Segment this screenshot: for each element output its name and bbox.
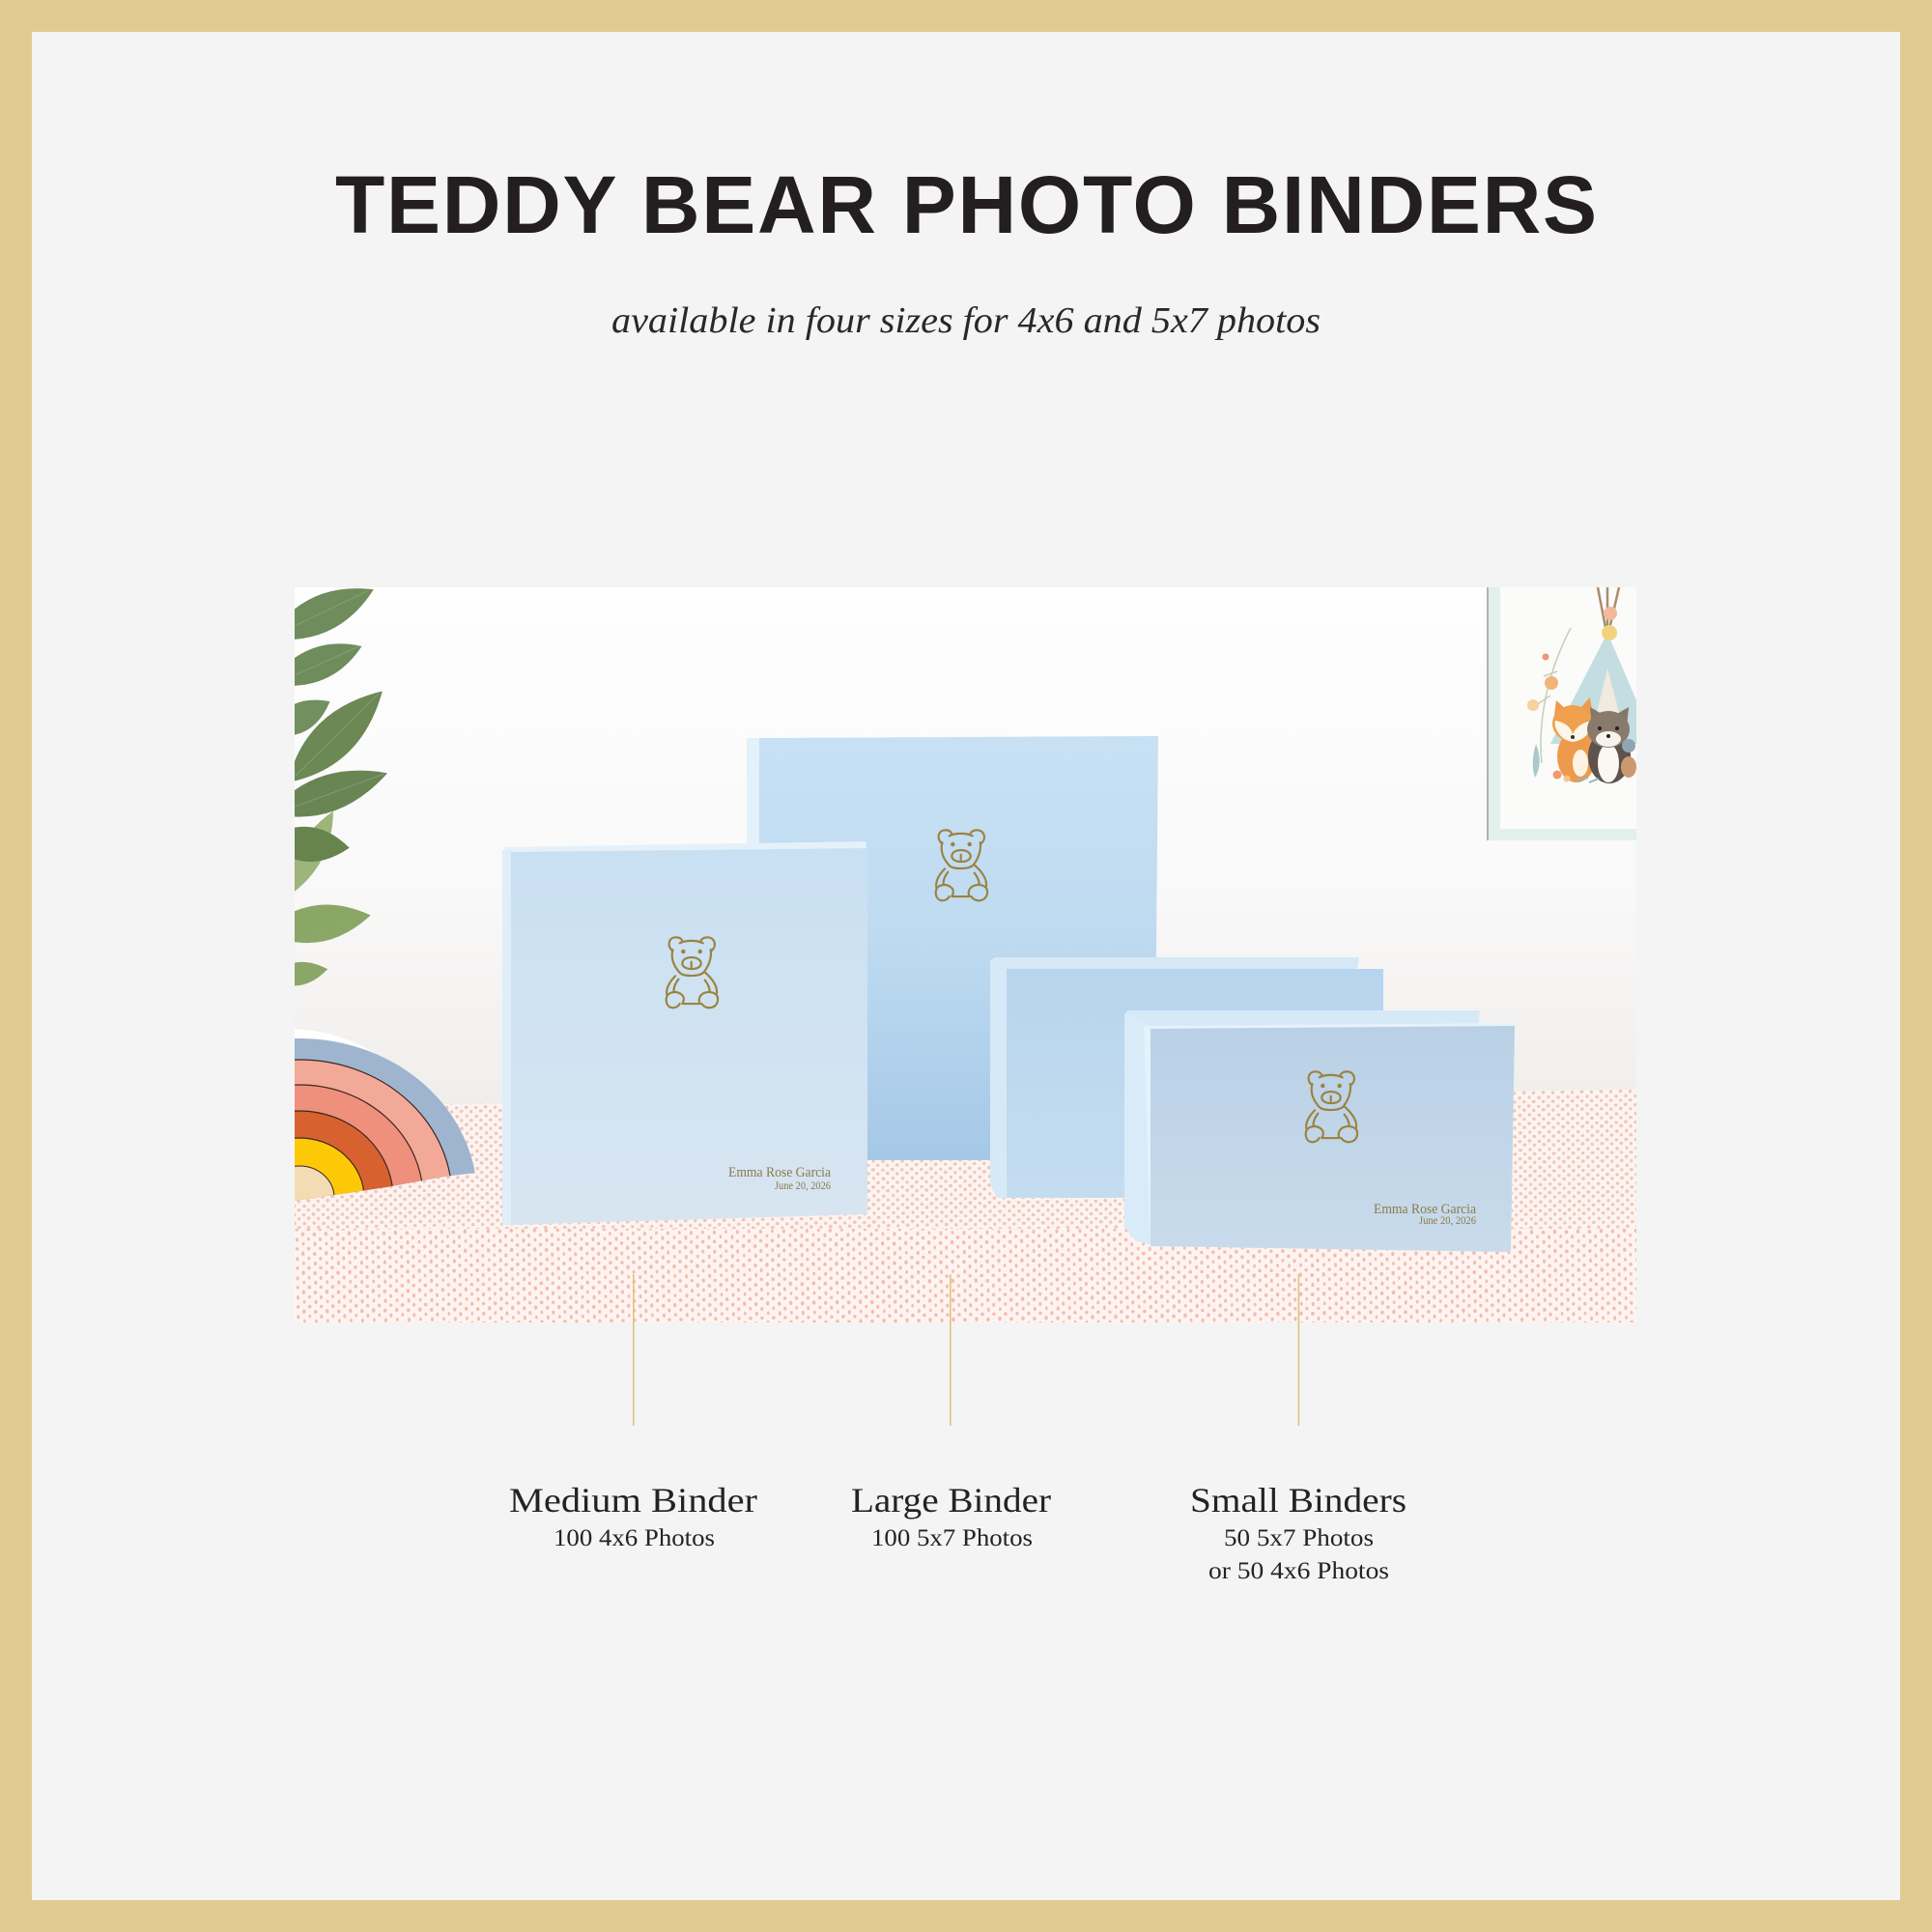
teddy bear emblem: medium binder: [667, 937, 718, 1008]
leader line: large binder: [950, 1274, 952, 1426]
label: large binder: 100 5x7 Photos: [871, 1525, 1033, 1551]
wall: [295, 587, 1487, 730]
teddy bear emblem: small binder: [1306, 1071, 1357, 1142]
title: TEDDY BEAR PHOTO BINDERS: [335, 159, 1597, 250]
small binder, back: [990, 957, 1383, 1198]
label: large binder: [851, 1481, 1051, 1551]
label: large binder: Large Binder: [851, 1481, 1051, 1520]
flowers: [1536, 628, 1571, 763]
small binder personalization: Emma Rose Garcia: [1374, 1202, 1476, 1217]
label: medium binder: Medium Binder: [509, 1481, 757, 1520]
leader line: medium binder: [633, 1274, 635, 1426]
framed nursery print: [1487, 587, 1645, 840]
medium binder personalization: [728, 1167, 831, 1191]
ground flowers: [1553, 771, 1561, 779]
photo: binders on a table: [295, 587, 1636, 1322]
label: medium binder: [509, 1481, 757, 1551]
small binder, front: [1124, 1010, 1515, 1252]
label: small binders: Small Binders: [1190, 1481, 1406, 1520]
medium binder personalization: Emma Rose Garcia: [728, 1165, 831, 1180]
subtitle: available in four sizes for 4x6 and 5x7 photos: [611, 300, 1321, 341]
label: small binders: or 50 4x6 Photos: [1208, 1558, 1389, 1584]
large binder: [747, 736, 1158, 1160]
baby animal: [1621, 756, 1636, 778]
leader line: small binders: [1298, 1274, 1299, 1426]
plant leaves: [295, 588, 387, 985]
raccoon: [1588, 741, 1631, 783]
table cloth: [295, 1090, 1636, 1322]
teddy bear emblem: large binder: [936, 830, 987, 900]
label: small binders: 50 5x7 Photos: [1224, 1525, 1374, 1551]
label: medium binder: 100 4x6 Photos: [554, 1525, 715, 1551]
small binder personalization: June 20, 2026: [1419, 1215, 1476, 1227]
fox: [1557, 735, 1592, 782]
small binder personalization: [1374, 1204, 1476, 1226]
wooden rainbow toy: [295, 1029, 475, 1201]
tepee: [1550, 633, 1636, 744]
medium binder: [502, 841, 867, 1225]
medium binder personalization: June 20, 2026: [775, 1180, 831, 1192]
label: small binders: [1190, 1481, 1406, 1584]
